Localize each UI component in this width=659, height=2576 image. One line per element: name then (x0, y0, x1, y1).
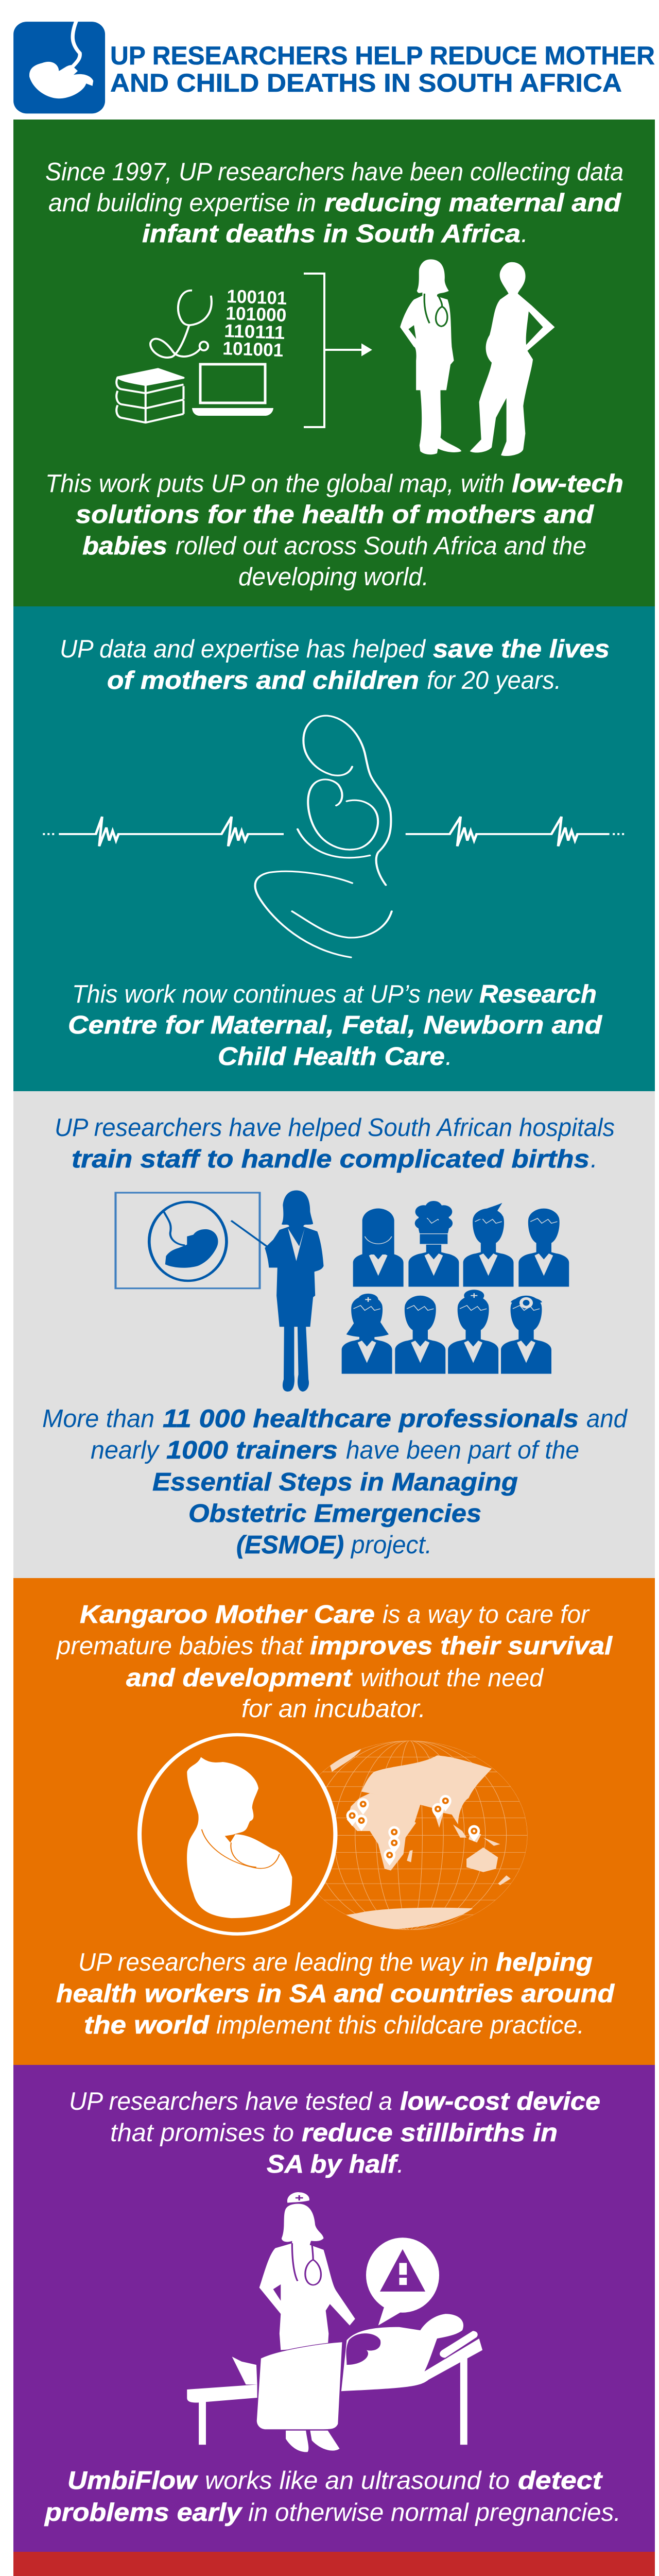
icon: projection screen with fetus (115, 1193, 259, 1289)
text block: UmbiFlow: detect (518, 2466, 603, 2495)
text block: global map (45, 469, 623, 591)
text block: research centre: This work now continues at UP’s new (72, 980, 473, 1008)
binary data digits: 101001 (222, 337, 284, 361)
text block: since 1997 (45, 158, 623, 248)
text block: kangaroo care: improves their survival (310, 1632, 613, 1660)
header icon: fetus badge (13, 21, 105, 113)
text block: train staff: . (591, 1145, 598, 1173)
text block: low-cost device (69, 2087, 600, 2178)
panel: saving lives (teal) (13, 606, 655, 1091)
text block: UmbiFlow (44, 2466, 621, 2527)
text block: save the lives: of mothers and children (107, 666, 419, 694)
binary data digits: 101000 (226, 302, 287, 326)
text block: low-cost device: SA by half (267, 2150, 399, 2178)
text block: helping health workers: implement this childcare practice. (216, 2011, 584, 2039)
text block: global map: low-tech (512, 469, 623, 498)
text block: ESMOE: 11 000 healthcare professionals (163, 1404, 579, 1433)
text block: low-cost device: reduce stillbirths in (302, 2119, 558, 2147)
text block: since 1997: . (521, 219, 528, 248)
text block: ESMOE: have been part of the (346, 1436, 579, 1464)
text block: low-cost device: low-cost device (400, 2087, 600, 2115)
panel: kangaroo mother care (orange) (13, 1578, 655, 2065)
text block: since 1997: infant deaths in South Africa (142, 219, 521, 248)
title (110, 41, 655, 97)
text block: low-cost device: that promises to (110, 2119, 294, 2147)
text block: UmbiFlow: UmbiFlow (67, 2466, 199, 2495)
binary data digits: 110111 (224, 320, 285, 343)
text block: helping health workers: health workers in SA and countries around (56, 1979, 615, 2008)
text block: helping health workers: the world (84, 2011, 210, 2039)
text block: ESMOE: Obstetric Emergencies (188, 1499, 481, 1528)
text block: save the lives: for 20 years. (427, 666, 561, 694)
text block: research centre (68, 980, 603, 1071)
panel: UmbiFlow (purple) (13, 2065, 655, 2552)
text block: kangaroo care: and development (126, 1664, 353, 1692)
world map with location pins (318, 1740, 527, 1930)
arrow: bracket to people (304, 274, 370, 427)
text block: kangaroo care: without the need (360, 1664, 544, 1692)
text block: global map: developing world. (238, 563, 429, 591)
text block: helping health workers: helping (496, 1948, 593, 1976)
text block: ESMOE: and (586, 1404, 628, 1433)
text block: helping health workers (56, 1948, 615, 2039)
text block: kangaroo care: premature babies that (56, 1632, 304, 1660)
title: UP RESEARCHERS HELP REDUCE MOTHER (110, 41, 655, 70)
binary data digits (222, 285, 287, 361)
panel: HIV and ARV (red) (13, 2552, 655, 2576)
text block: train staff (55, 1113, 615, 1173)
text block: kangaroo care: for an incubator. (241, 1694, 426, 1723)
text block: ESMOE: project. (350, 1531, 432, 1559)
text block: global map: This work puts UP on the global map, with (45, 469, 505, 498)
text block: ESMOE: Essential Steps in Managing (152, 1468, 518, 1496)
text block: save the lives: UP data and expertise has helped (60, 635, 426, 663)
text block: since 1997: reducing maternal and (324, 189, 622, 217)
text block: helping health workers: UP researchers are leading the way in (78, 1948, 489, 1976)
text block: kangaroo care (56, 1600, 613, 1723)
text block: since 1997: Since 1997, UP researchers have been collecting data (45, 158, 623, 186)
text block: since 1997: and building expertise in (48, 189, 316, 217)
text block: kangaroo care: Kangaroo Mother Care (80, 1600, 375, 1629)
icon: doctor and pregnant woman silhouettes (400, 259, 555, 456)
text block: global map: solutions for the health of mothers and (76, 500, 595, 529)
binary data digits: 100101 (227, 285, 287, 309)
icon: presenter silhouette with pointer (231, 1191, 324, 1392)
title: AND CHILD DEATHS IN SOUTH AFRICA (110, 69, 622, 97)
text block: ESMOE (42, 1404, 628, 1559)
icon: warning speech bubble (366, 2238, 439, 2326)
heartbeat line (43, 817, 626, 846)
icon: nurse examining patient on bed (187, 2192, 482, 2452)
panel: data and expertise (green) (13, 120, 655, 606)
text block: research centre: . (445, 1042, 453, 1071)
text block: low-cost device: UP researchers have tested a (69, 2087, 392, 2115)
text block: ESMOE: More than (42, 1404, 154, 1433)
text block: ESMOE: 1000 trainers (166, 1436, 338, 1464)
icon: group of healthcare professionals (342, 1201, 569, 1374)
text block: UmbiFlow: in otherwise normal pregnancies. (248, 2498, 621, 2527)
panel: training (grey) (13, 1091, 655, 1578)
text block: low-cost device: . (397, 2150, 404, 2178)
text block: ESMOE: nearly (91, 1436, 160, 1464)
text block: train staff: train staff to handle complicated births (72, 1145, 589, 1173)
text block: UmbiFlow: works like an ultrasound to (205, 2466, 510, 2495)
icon: stethoscope (150, 291, 212, 358)
icon: books (116, 369, 183, 422)
text block: UmbiFlow: problems early (44, 2498, 243, 2527)
text block: global map: rolled out across South Africa and the (176, 532, 586, 560)
text block: kangaroo care: is a way to care for (383, 1600, 590, 1629)
text block: train staff: UP researchers have helped South African hospitals (55, 1113, 615, 1142)
text block: save the lives (60, 635, 610, 694)
icon: laptop (192, 364, 273, 416)
icon: mother carrying baby in circle (140, 1735, 335, 1934)
text block: research centre: Research (479, 980, 597, 1008)
text block: research centre: Centre for Maternal, Fetal, Newborn and (68, 1011, 603, 1039)
text block: research centre: Child Health Care (218, 1042, 445, 1071)
icon: mother and child line drawing (255, 716, 392, 957)
text block: ESMOE: (ESMOE) (236, 1531, 344, 1559)
text block: global map: babies (82, 532, 167, 560)
text block: save the lives: save the lives (433, 635, 610, 663)
